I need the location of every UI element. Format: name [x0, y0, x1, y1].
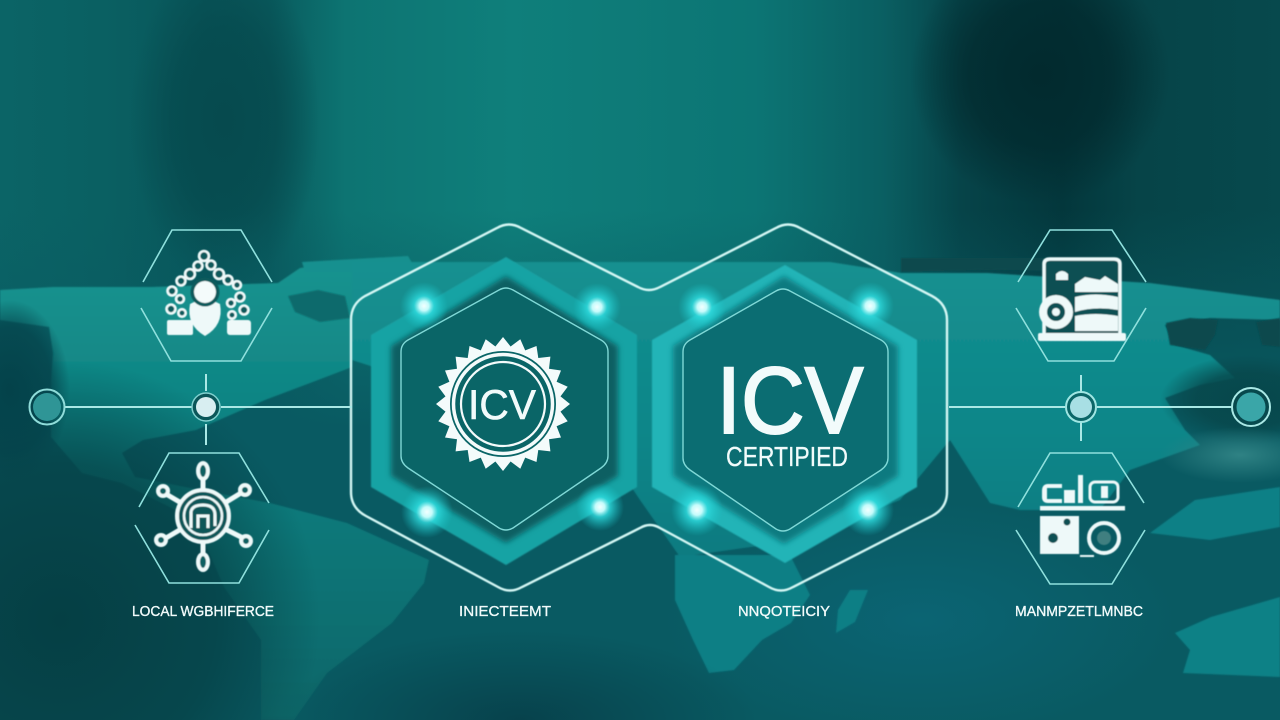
left inner shadow	[391, 276, 618, 543]
right inner shadow	[673, 276, 898, 544]
right inner hexagon	[683, 289, 888, 531]
icon: top right laptop dashboard	[1016, 230, 1146, 361]
world map	[0, 256, 1280, 720]
label: inner right: NNQOTEICIY	[738, 603, 830, 620]
glowing nodes	[400, 282, 894, 538]
left connector	[30, 374, 352, 445]
icon: bottom right equipment panel	[1016, 453, 1145, 584]
seal label: ICV	[468, 381, 536, 428]
label: local: LOCAL WGBHIFERCE	[132, 603, 274, 620]
icon: top left network figure	[141, 230, 272, 361]
icon: bottom left hub wheel	[135, 453, 269, 583]
central double hexagon	[351, 224, 947, 590]
right connector	[949, 375, 1270, 441]
icv title: ICV	[716, 348, 864, 454]
label: inner left: INIECTEEMT	[459, 603, 551, 620]
right light band	[652, 265, 917, 563]
label: right: MANMPZETLMNBC	[1015, 603, 1143, 620]
left light band	[371, 257, 637, 565]
outer outline	[351, 224, 947, 590]
left inner hexagon	[401, 288, 608, 530]
icv seal badge	[436, 337, 570, 471]
certified label: CERTIPIED	[726, 441, 848, 472]
